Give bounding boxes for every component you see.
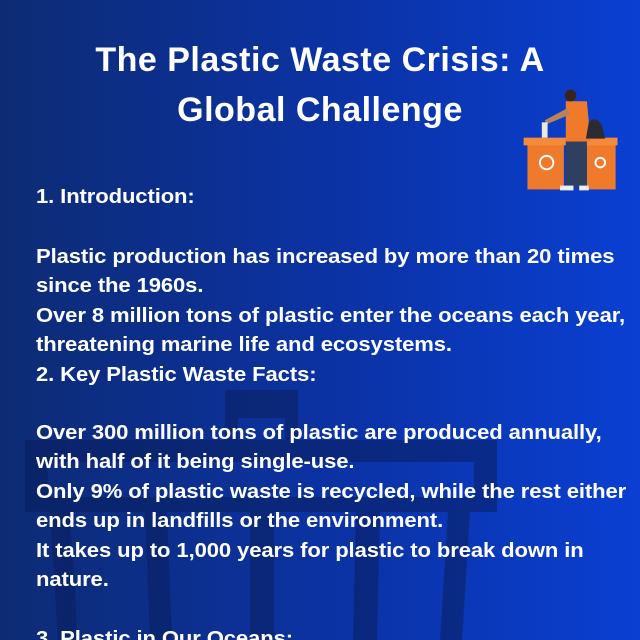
text block: body sections: ends up in landfills or the environment. [36, 509, 443, 532]
text block: body sections: Over 300 million tons of plastic are produced annually, [36, 421, 602, 444]
text block: body sections: nature. [36, 568, 109, 591]
text block: body sections: threatening marine life and ecosystems. [36, 333, 452, 356]
title: Global Challenge [177, 91, 463, 129]
text block: body sections: 2. Key Plastic Waste Facts: [36, 363, 316, 386]
text block: body sections: 1. Introduction: [36, 185, 195, 208]
text block: body sections: with half of it being single-use. [36, 450, 354, 473]
text block: body sections: since the 1960s. [36, 274, 203, 297]
text block: body sections: Over 8 million tons of plastic enter the oceans each year, [36, 304, 625, 327]
text block: body sections: It takes up to 1,000 years for plastic to break down in [36, 539, 584, 562]
text block: body sections: Only 9% of plastic waste is recycled, while the rest either [36, 480, 626, 503]
title [95, 41, 545, 129]
text block: body sections: Plastic production has increased by more than 20 times [36, 245, 614, 268]
icon: person recycling at bins [524, 90, 618, 190]
title: The Plastic Waste Crisis: A [95, 41, 545, 79]
